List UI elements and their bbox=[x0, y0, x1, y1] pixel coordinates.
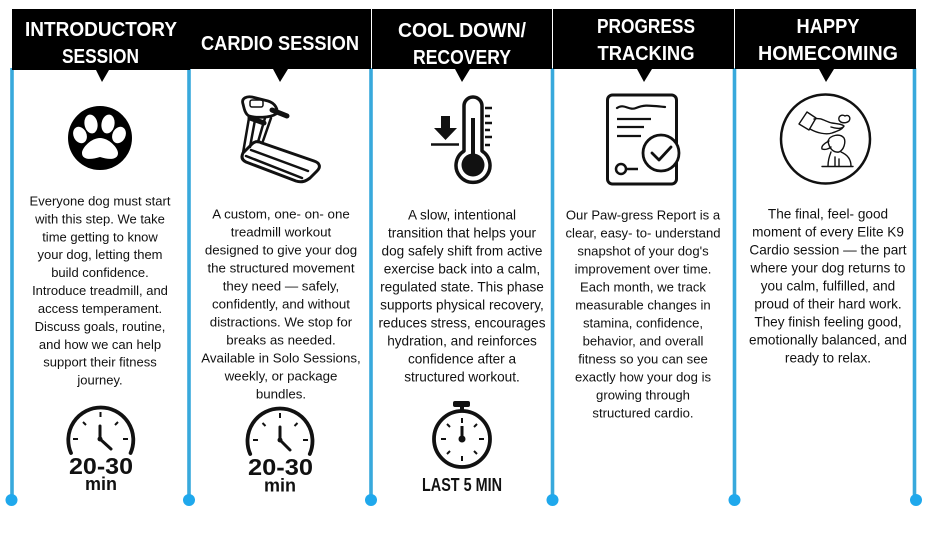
header: cardio session: CARDIO SESSION bbox=[201, 33, 359, 55]
text: progress tracking: measurable changes in bbox=[575, 298, 711, 312]
text: progress tracking: Our Paw-gress Report is a bbox=[566, 208, 721, 222]
timeline line and dot 3 bbox=[365, 68, 377, 506]
text: introductory session: Discuss goals, routine, bbox=[35, 319, 165, 334]
header: cool down/recovery: RECOVERY bbox=[413, 47, 512, 69]
icon: clock 20-30 min, column 2 bbox=[248, 409, 313, 496]
text: cool down: exercise back into a calm, bbox=[384, 262, 540, 276]
text: cardio session: Available in Solo Sessions, bbox=[201, 350, 361, 366]
text: cardio session bbox=[201, 206, 361, 402]
text: progress tracking: improvement over time. bbox=[575, 262, 711, 276]
text: cool down: A slow, intentional bbox=[408, 208, 516, 222]
text: cool down: dog safely shift from active bbox=[382, 244, 542, 258]
text: happy homecoming: The final, feel- good bbox=[768, 206, 888, 222]
icon: stopwatch last 5 min bbox=[422, 401, 502, 495]
text: happy homecoming: moment of every Elite K9 bbox=[752, 224, 904, 240]
text: introductory session: journey. bbox=[76, 372, 123, 388]
text: introductory session: time getting to know bbox=[42, 230, 158, 244]
text: cool down: structured workout. bbox=[404, 370, 520, 384]
text: cardio session: designed to give your dog bbox=[205, 242, 357, 258]
text: happy homecoming: you calm, fulfilled, and bbox=[761, 278, 895, 294]
text: cardio session: weekly, or package bbox=[224, 368, 337, 384]
text: happy homecoming: ready to relax. bbox=[785, 350, 871, 366]
text: cardio session: bundles. bbox=[256, 386, 306, 402]
icon: hand petting dog bbox=[781, 94, 870, 184]
header: progress tracking: PROGRESS bbox=[597, 16, 695, 38]
text: progress tracking: fitness so you can see bbox=[578, 352, 708, 366]
timeline line and dot 5 bbox=[728, 68, 740, 506]
header: happy homecoming bbox=[735, 9, 916, 82]
icon: stopwatch last 5 min: LAST 5 MIN bbox=[422, 474, 502, 495]
icon: progress report bbox=[608, 95, 679, 184]
text: cool down bbox=[378, 208, 546, 384]
text: cardio session: confidently, and without bbox=[212, 296, 350, 312]
header: introductory session bbox=[12, 9, 190, 82]
text: cool down: transition that helps your bbox=[388, 226, 537, 240]
text: happy homecoming: emotionally balanced, and bbox=[749, 332, 907, 348]
text: progress tracking: snapshot of your dog's bbox=[577, 244, 709, 258]
text: progress tracking: clear, easy- to- understand bbox=[565, 226, 721, 240]
text: introductory session: Introduce treadmill, and bbox=[32, 283, 168, 298]
text: introductory session: access temperament. bbox=[38, 301, 162, 316]
icon: clock 20-30 min, column 1: min bbox=[85, 474, 117, 494]
text: happy homecoming bbox=[749, 206, 907, 366]
text: progress tracking bbox=[565, 208, 721, 420]
text: progress tracking: growing through bbox=[596, 388, 690, 402]
text: introductory session: your dog, letting them bbox=[37, 247, 163, 262]
header: progress tracking: TRACKING bbox=[598, 43, 694, 65]
timeline line and dot 2 bbox=[183, 68, 195, 506]
text: introductory session: with this step. We take bbox=[34, 212, 165, 226]
text: cool down: hydration, and reinforces bbox=[387, 334, 537, 348]
header: introductory session: INTRODUCTORY bbox=[25, 19, 178, 41]
text: progress tracking: structured cardio. bbox=[592, 406, 694, 420]
header: cardio session bbox=[190, 9, 371, 82]
icon: clock 20-30 min, column 2: min bbox=[264, 476, 296, 496]
timeline line and dot 1 bbox=[6, 68, 18, 506]
text: progress tracking: exactly how your dog is bbox=[575, 370, 711, 384]
text: introductory session: and how we can help bbox=[39, 337, 161, 352]
text: cardio session: breaks as needed. bbox=[226, 332, 336, 348]
text: progress tracking: behavior, and overall bbox=[583, 334, 704, 348]
text: happy homecoming: They finish feeling good, bbox=[754, 314, 902, 330]
text: cool down: confidence after a bbox=[408, 352, 516, 366]
header: happy homecoming: HAPPY bbox=[796, 16, 860, 38]
header: happy homecoming: HOMECOMING bbox=[758, 43, 898, 65]
text: cardio session: treadmill workout bbox=[231, 224, 332, 240]
icon: thermometer with down arrow bbox=[431, 97, 492, 182]
text: cardio session: A custom, one- on- one bbox=[212, 206, 350, 222]
text: happy homecoming: Cardio session — the part bbox=[749, 242, 907, 258]
text: introductory session: build confidence. bbox=[51, 265, 149, 280]
text: cardio session: they need — safely, bbox=[223, 278, 339, 294]
text: cardio session: distractions. We stop for bbox=[210, 314, 353, 330]
timeline line and dot 4 bbox=[546, 68, 558, 506]
header: cool down/recovery: COOL DOWN/ bbox=[398, 20, 526, 42]
text: cool down: supports physical recovery, bbox=[380, 298, 544, 312]
text: cool down: regulated state. This phase bbox=[380, 280, 544, 294]
timeline line and dot 6 bbox=[910, 68, 922, 506]
icon: clock 20-30 min, column 1: 20-30 bbox=[69, 453, 133, 479]
icon: treadmill bbox=[242, 97, 319, 182]
text: introductory session: support their fitness bbox=[43, 354, 157, 370]
header: introductory session: SESSION bbox=[62, 46, 139, 68]
text: happy homecoming: where your dog returns to bbox=[750, 260, 905, 276]
text: happy homecoming: proud of their hard work. bbox=[754, 296, 902, 312]
text: cardio session: the structured movement bbox=[207, 260, 355, 276]
text: introductory session: Everyone dog must start bbox=[30, 194, 171, 208]
icon: clock 20-30 min, column 1 bbox=[68, 408, 133, 494]
text: progress tracking: Each month, we track bbox=[580, 280, 706, 294]
text: progress tracking: stamina, confidence, bbox=[583, 316, 703, 330]
text: cool down: reduces stress, encourages bbox=[378, 316, 546, 330]
header: progress tracking bbox=[553, 9, 734, 82]
icon: clock 20-30 min, column 2: 20-30 bbox=[248, 454, 313, 480]
icon: paw print bbox=[68, 106, 132, 170]
text: introductory session bbox=[30, 194, 171, 388]
header: cool down/recovery bbox=[372, 9, 552, 82]
